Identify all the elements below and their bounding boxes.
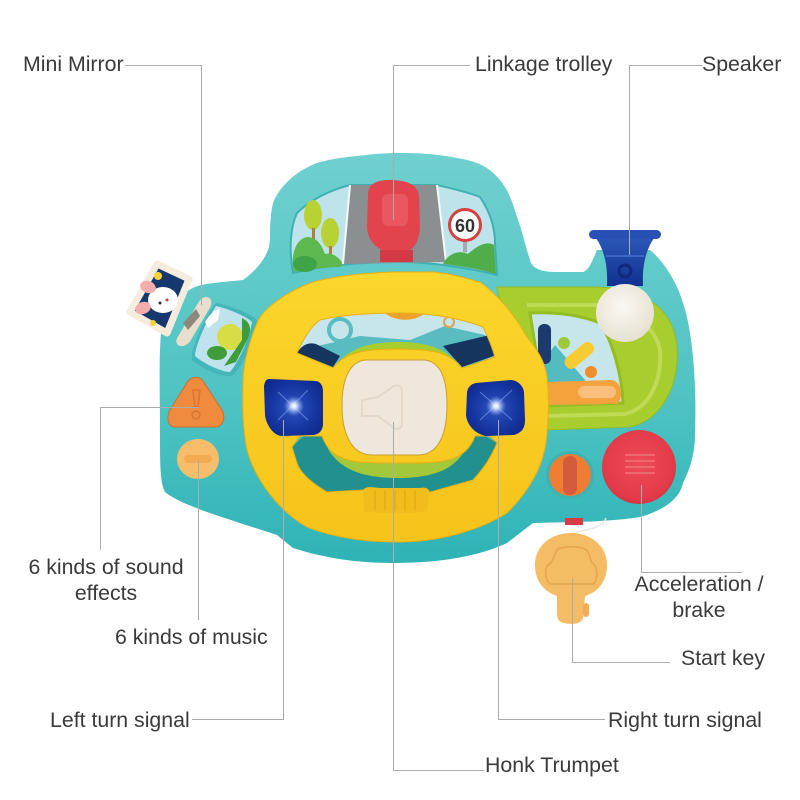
- orange triangle button: [168, 377, 224, 427]
- orange key slot: [546, 451, 594, 499]
- label: Right turn signal: Right turn signal: [608, 708, 762, 732]
- scene window: 60: [455, 216, 475, 236]
- toy dashboard: [130, 153, 695, 624]
- yellow steering wheel: [243, 272, 548, 542]
- leader: Mini Mirror: [125, 66, 202, 305]
- red linkage trolley: [367, 180, 420, 262]
- label: Honk Trumpet: Honk Trumpet: [485, 753, 619, 777]
- bushes right: [443, 243, 496, 274]
- label: Mini Mirror: Mini Mirror: [23, 52, 124, 76]
- label: Linkage trolley: Linkage trolley: [475, 52, 613, 76]
- speaker trumpet: [589, 230, 661, 286]
- leader: music: [198, 460, 200, 620]
- scene window: [291, 180, 497, 275]
- turtle panel: [192, 303, 257, 376]
- road: [343, 185, 446, 264]
- label: 6 kinds of sound effects: 6 kinds of sound: [28, 555, 184, 579]
- leader: honk: [394, 422, 484, 770]
- start key: [535, 518, 607, 624]
- mirror: rabbit: [130, 264, 209, 344]
- teal body: [160, 153, 695, 563]
- orange slider: [547, 380, 621, 405]
- lower wheel scene: [292, 433, 497, 493]
- label: Speaker: Speaker: [702, 52, 781, 76]
- leader: right turn: [498, 420, 605, 720]
- music button: [177, 439, 219, 479]
- label: 6 kinds of music: 6 kinds of music: [115, 625, 268, 649]
- trees left: [304, 200, 322, 230]
- left blue turn signal: [264, 379, 323, 436]
- label: Left turn signal: Left turn signal: [50, 708, 190, 732]
- right blue turn signal: [466, 380, 525, 436]
- label: 6 kinds of sound effects: [28, 555, 184, 605]
- white ball: [596, 284, 654, 342]
- leader: left turn: [192, 420, 284, 720]
- bushes left: [293, 237, 342, 272]
- label: Acceleration / brake: [634, 572, 764, 622]
- sign 60: [463, 238, 467, 252]
- honk pad: [342, 360, 447, 455]
- leader: start key: [572, 578, 670, 662]
- leader: Speaker: [630, 66, 702, 255]
- label: 6 kinds of sound effects: effects: [75, 581, 137, 605]
- label: Acceleration / brake: Acceleration /: [634, 572, 764, 596]
- leader: acceleration: [642, 485, 742, 572]
- label: Acceleration / brake: brake: [672, 598, 726, 622]
- green panel: [497, 287, 677, 430]
- label: Start key: Start key: [681, 646, 765, 670]
- leader: Linkage trolley: [394, 66, 470, 220]
- bottom wheel grip: [363, 487, 430, 513]
- upper wheel scene: [297, 313, 495, 370]
- leader: sound effects: [100, 408, 199, 550]
- red acceleration ball: [602, 430, 676, 504]
